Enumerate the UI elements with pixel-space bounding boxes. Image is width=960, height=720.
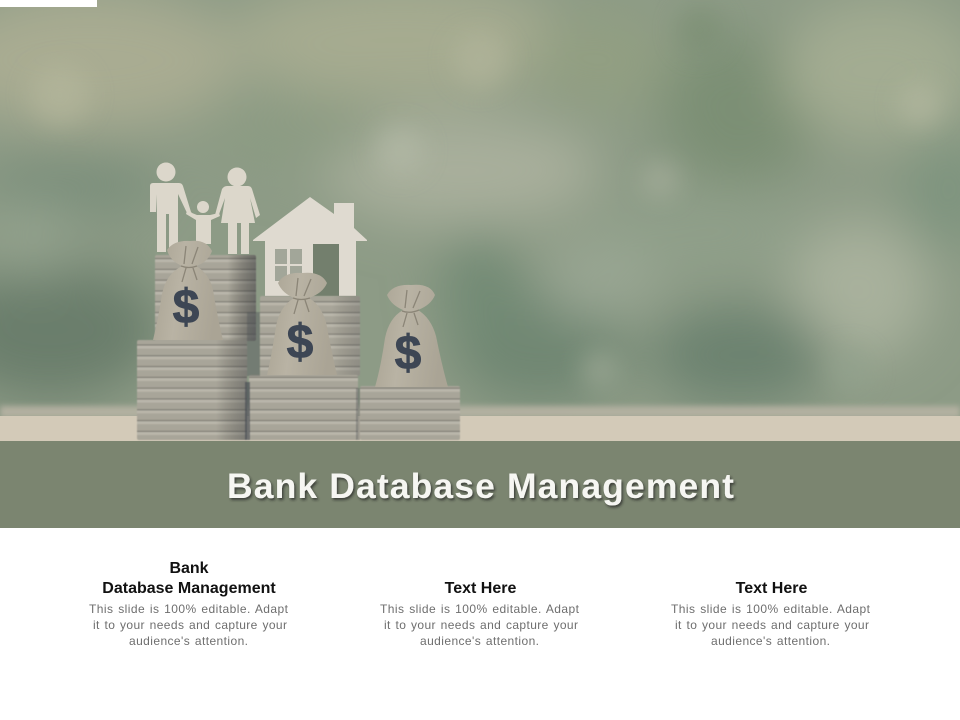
- dollar sign: $: [173, 281, 200, 334]
- coin stack: front middle: [249, 375, 358, 440]
- title band: [0, 441, 960, 528]
- background photo: blurred green bokeh: [0, 0, 960, 441]
- column 3 heading: Text Here: [736, 580, 807, 597]
- coin stack: back left: [155, 255, 256, 341]
- column 1 heading: Bank: [169, 560, 209, 577]
- dollar sign: $: [287, 316, 314, 369]
- column 2: [380, 580, 580, 648]
- title: Bank Database Management: [227, 466, 734, 506]
- icon: money bag left: [153, 241, 223, 340]
- coin stack: front left: [137, 340, 247, 440]
- column 2 body: audience's attention.: [420, 634, 539, 648]
- father: [150, 162, 194, 252]
- icon: money bag right: [375, 285, 448, 387]
- icon: money bag middle: [267, 273, 337, 375]
- column 2 heading: Text Here: [445, 580, 516, 597]
- coin stack: right: [360, 386, 460, 440]
- column 3 body: This slide is 100% editable. Adapt: [671, 602, 871, 616]
- coin stacks: [137, 255, 460, 440]
- coin stack: back middle: [260, 296, 360, 376]
- column 1 body: This slide is 100% editable. Adapt: [89, 602, 289, 616]
- mother: [215, 168, 260, 254]
- child: [186, 201, 220, 244]
- column 3 body: it to your needs and capture your: [675, 618, 869, 632]
- white tab top left: [0, 0, 97, 7]
- column 3: [671, 580, 871, 648]
- column 2 body: it to your needs and capture your: [384, 618, 578, 632]
- dollar sign: $: [395, 327, 422, 380]
- column 1 body: it to your needs and capture your: [93, 618, 287, 632]
- column 1: [89, 560, 289, 648]
- icon: paper family: [150, 162, 260, 254]
- column 2 body: This slide is 100% editable. Adapt: [380, 602, 580, 616]
- table surface: [0, 406, 960, 441]
- icon: paper house: [253, 197, 367, 296]
- column 1 body: audience's attention.: [129, 634, 248, 648]
- column 3 body: audience's attention.: [711, 634, 830, 648]
- column 1 heading: Database Management: [102, 580, 276, 597]
